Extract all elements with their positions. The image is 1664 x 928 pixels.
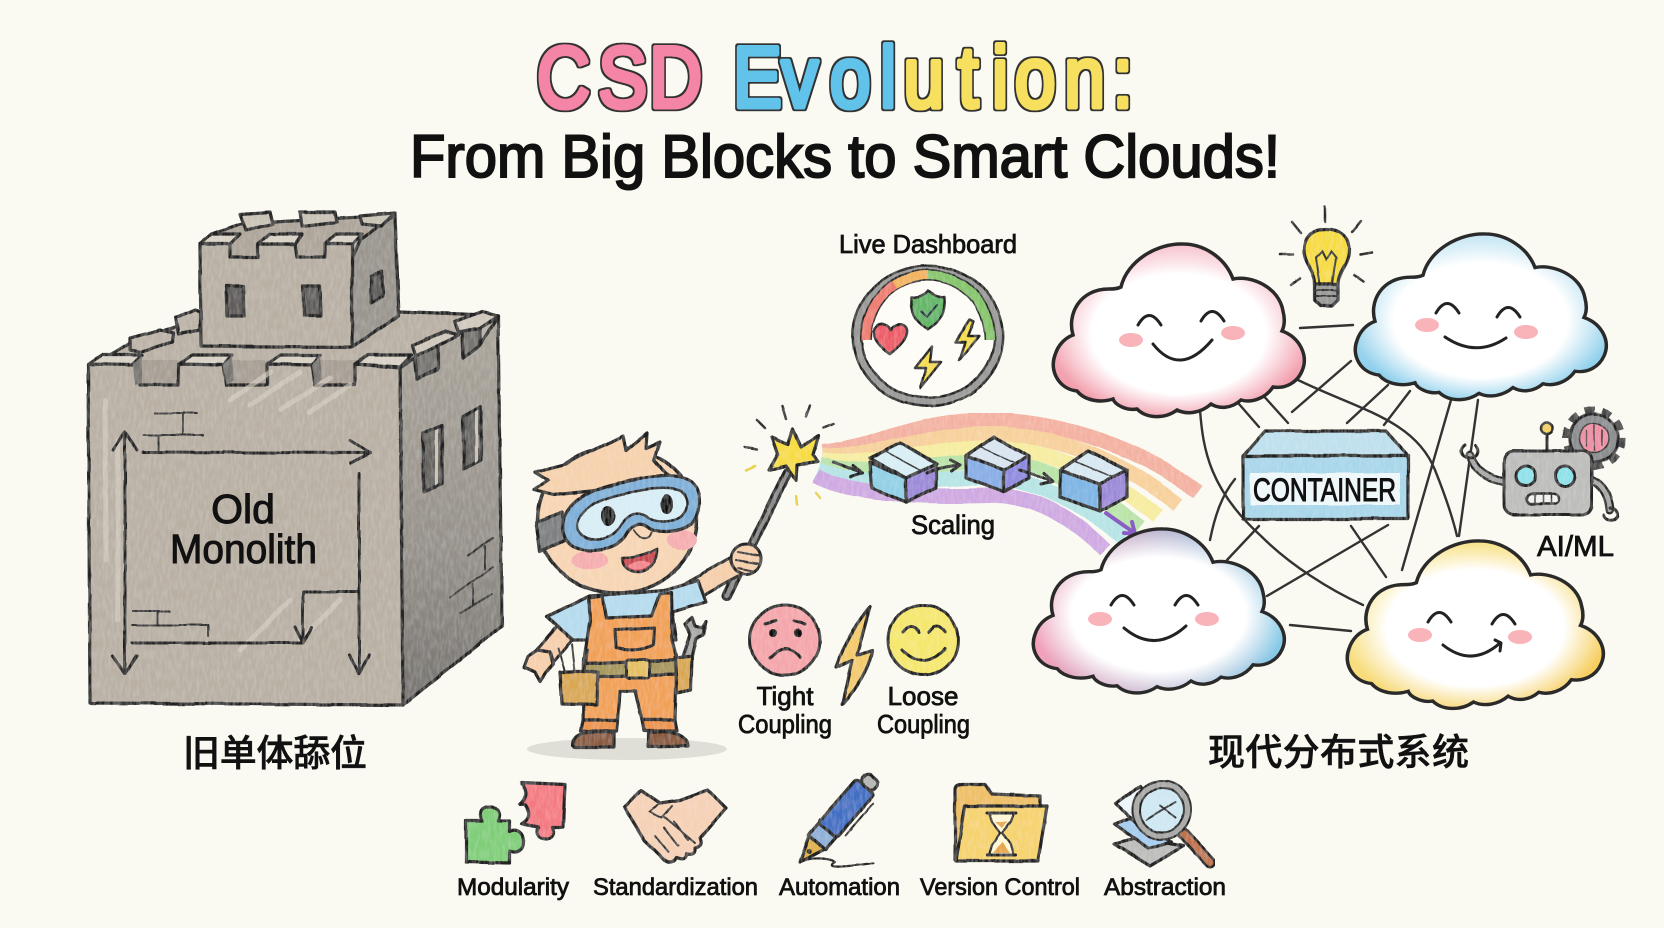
label: automation: Automation <box>779 874 900 901</box>
side windows <box>423 406 481 492</box>
overalls <box>583 592 677 720</box>
wand <box>727 473 787 596</box>
belt <box>584 660 677 677</box>
cheeks <box>572 551 608 569</box>
castle front face <box>88 364 403 705</box>
icon: bolts <box>955 320 979 360</box>
wrench <box>680 618 706 664</box>
boots <box>573 732 614 747</box>
arrows around monolith <box>113 432 370 674</box>
icon: heart <box>874 324 907 354</box>
label: tight coupling: Tight <box>757 681 814 711</box>
label: tight coupling <box>738 681 832 739</box>
front merlon tops <box>88 355 412 367</box>
label: version control: Version Control <box>920 874 1080 901</box>
box 2 <box>966 437 1029 492</box>
label: loose coupling: Coupling <box>877 709 970 739</box>
mouth <box>622 549 657 572</box>
icon: happy face <box>888 605 958 675</box>
label: loose coupling: Loose <box>888 681 958 711</box>
icon: puzzle pieces <box>466 783 565 863</box>
icon: sad face <box>750 605 820 675</box>
title: CSD <box>537 29 702 125</box>
icon: shield <box>911 291 945 329</box>
bricks <box>132 413 493 636</box>
icon: magnifier over layers <box>1114 784 1210 866</box>
goggle strap <box>536 512 566 552</box>
title <box>537 29 1133 125</box>
icon: lightning bolt <box>836 607 872 705</box>
label: old monolith <box>170 486 317 572</box>
label: modularity: Modularity <box>457 874 569 901</box>
goggles <box>562 476 700 550</box>
cloud faces <box>1088 304 1538 656</box>
label: scaling: Scaling <box>911 510 995 540</box>
box 1 <box>870 443 937 502</box>
icon: magic star wand and sparks <box>745 406 833 505</box>
label: old monolith: Monolith <box>170 526 317 572</box>
icon: container box <box>1243 431 1408 519</box>
illustration: container network clouds <box>1033 234 1606 708</box>
label: old monolith chinese: 旧单体舔位 <box>183 733 367 774</box>
label: tight coupling: Coupling <box>738 709 832 739</box>
icon: handshake <box>624 790 726 863</box>
hair <box>534 433 670 495</box>
robot arms <box>1470 455 1504 481</box>
icon: lightbulb <box>1280 207 1372 306</box>
panel: distributed network lines <box>1200 325 1478 631</box>
notch shadows <box>133 356 322 385</box>
scaling arrows <box>833 460 1053 484</box>
box 3 <box>1060 451 1127 511</box>
panel: scaling boxes <box>833 437 1127 511</box>
arms <box>540 630 567 662</box>
upper tower <box>200 212 399 347</box>
title: ution: <box>904 29 1133 125</box>
label: abstraction: Abstraction <box>1104 874 1226 901</box>
icon: robot <box>1461 412 1620 520</box>
head <box>537 447 697 593</box>
label: old monolith: Old <box>211 486 275 532</box>
robot antenna <box>1546 433 1548 450</box>
label: ai ml: AI/ML <box>1537 531 1614 563</box>
robot head <box>1504 451 1592 515</box>
castle roof <box>100 312 498 372</box>
tool pouches <box>560 672 598 705</box>
icon: fountain pen <box>791 770 886 873</box>
castle back merlons <box>130 310 200 352</box>
tower windows <box>226 271 383 316</box>
label: container: CONTAINER <box>1253 472 1396 508</box>
icon: live dashboard gauge <box>857 270 999 402</box>
label: loose coupling <box>877 681 970 739</box>
cloud: yellow <box>1347 541 1603 708</box>
label: live dashboard: Live Dashboard <box>839 229 1017 259</box>
label: standardization: Standardization <box>593 874 758 901</box>
icon: folder with hourglass <box>955 785 1047 861</box>
light rays <box>1280 207 1372 285</box>
chart: rainbow scaling path <box>816 420 1198 550</box>
robot gear <box>1568 412 1620 464</box>
arrow: purple rainbow tip <box>1106 513 1135 534</box>
castle side face <box>400 316 502 705</box>
panel: old monolith castle <box>88 212 502 705</box>
subtitle: From Big Blocks to Smart Clouds! <box>410 123 1280 190</box>
cloud: pink <box>1053 244 1304 417</box>
hatch highlights <box>105 372 350 650</box>
hourglass <box>989 813 1014 855</box>
label: modern distributed system: 现代分布式系统 <box>1208 732 1469 773</box>
ground shadow <box>527 738 727 760</box>
sparkles <box>746 466 820 505</box>
character: engineer with goggles <box>524 433 787 760</box>
title: Evol <box>733 29 896 125</box>
icon row: principles <box>466 770 1210 873</box>
overalls pocket <box>615 628 655 650</box>
side merlon insides <box>415 320 480 379</box>
cloud: blue <box>1355 234 1606 400</box>
eyes <box>601 506 615 526</box>
cloud: pink blue <box>1033 529 1284 693</box>
nose <box>634 530 652 538</box>
gauge arc <box>866 275 990 340</box>
shirt <box>547 580 706 640</box>
